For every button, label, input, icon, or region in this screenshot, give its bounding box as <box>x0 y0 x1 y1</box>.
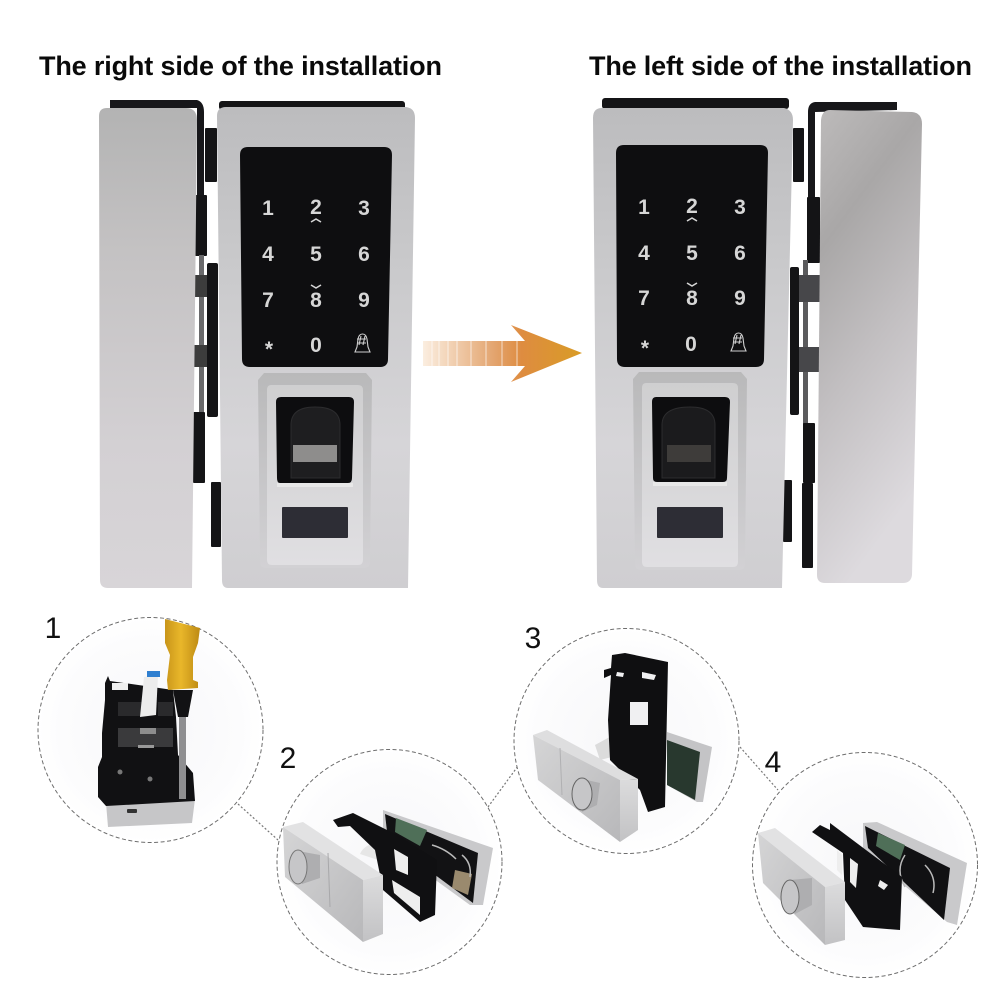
connector: step 3 to 4 <box>740 747 778 790</box>
ribbon cable <box>595 733 620 760</box>
keypad digits: 9 <box>358 289 370 312</box>
hinge clamps <box>193 128 221 547</box>
keypad digits: 5 <box>310 243 322 266</box>
number 3: 3 <box>525 622 541 655</box>
keypad digits: 8 <box>310 289 322 312</box>
knob <box>298 851 320 884</box>
small display <box>282 507 348 538</box>
keypad digits: 2 <box>686 195 698 218</box>
icon: bell <box>355 334 370 352</box>
keypad digits: 5 <box>686 242 698 265</box>
front block <box>283 822 383 942</box>
hinge clamps <box>783 128 821 568</box>
black bracket <box>333 813 437 922</box>
circuit board <box>395 818 427 846</box>
fingerprint sensor window <box>652 397 730 482</box>
screwdriver shaft <box>179 716 186 799</box>
screwdriver handle <box>165 619 200 690</box>
small display <box>657 507 723 538</box>
ribbon cable <box>360 842 380 860</box>
product: lock installed on the left side <box>593 98 922 588</box>
keypad digits: 9 <box>734 287 746 310</box>
number 2: 2 <box>280 742 296 775</box>
keypad digits: 6 <box>358 243 370 266</box>
panel: step 1 <box>38 612 263 842</box>
door panel back edge <box>110 100 204 200</box>
panel: step 4 <box>752 746 978 978</box>
fingerprint sensor window <box>276 397 354 483</box>
title: left side: The left side of the installation <box>589 51 972 81</box>
keypad digits: 4 <box>638 242 650 265</box>
black bracket <box>98 676 195 806</box>
title: right side: The right side of the installation <box>39 51 442 81</box>
ribbon cable <box>140 675 158 717</box>
screwdriver collet <box>173 690 193 717</box>
keypad digits: 0 <box>685 333 697 356</box>
keypad screen <box>616 145 768 367</box>
panel: step 2 <box>277 742 502 974</box>
icon: bell <box>731 333 746 351</box>
bracket windows <box>112 683 173 782</box>
door clamp panel <box>817 110 922 583</box>
circle <box>514 628 739 854</box>
keypad digits: 4 <box>262 243 274 266</box>
circuit board <box>876 833 905 860</box>
keypad digits: 1 <box>262 197 274 220</box>
connector: step 2 to 3 <box>488 766 518 807</box>
product: lock installed on the right side <box>99 100 415 588</box>
keypad screen <box>240 147 392 367</box>
back shell <box>383 810 493 905</box>
keypad digits <box>638 195 746 360</box>
keypad digits: 7 <box>262 289 274 312</box>
lock body <box>593 108 793 588</box>
lock body top edge <box>602 98 789 109</box>
keypad digits: 3 <box>734 196 746 219</box>
door clamp panel <box>99 108 197 588</box>
knob <box>790 878 812 914</box>
back shell <box>863 822 967 925</box>
keypad digits: 6 <box>734 242 746 265</box>
keypad digits: * <box>265 338 274 361</box>
keypad digits: 0 <box>310 334 322 357</box>
lock base <box>106 799 195 827</box>
keypad digits: 2 <box>310 196 322 219</box>
front block <box>758 828 845 945</box>
keypad digits: 3 <box>358 197 370 220</box>
keypad digits: 8 <box>686 287 698 310</box>
lock body <box>217 107 415 588</box>
lock body top edge <box>219 101 405 110</box>
keypad digits: 7 <box>638 287 650 310</box>
number 4: 4 <box>765 746 781 779</box>
circle <box>277 750 502 974</box>
knob <box>578 778 600 812</box>
keypad digits: 1 <box>638 196 650 219</box>
circle <box>38 618 263 842</box>
fingerprint module <box>633 372 747 570</box>
black bracket <box>604 653 668 812</box>
front block <box>533 730 638 842</box>
connector: step 1 to 2 <box>238 804 278 840</box>
arrow <box>423 325 582 382</box>
panel: step 3 <box>514 622 739 854</box>
back shell <box>667 732 712 802</box>
fingerprint module <box>258 373 372 568</box>
circle <box>752 752 978 978</box>
keypad digits <box>262 196 370 361</box>
black bracket <box>812 823 902 930</box>
keypad digits: * <box>641 337 650 360</box>
door panel back edge <box>808 102 897 200</box>
number 1: 1 <box>45 612 61 645</box>
